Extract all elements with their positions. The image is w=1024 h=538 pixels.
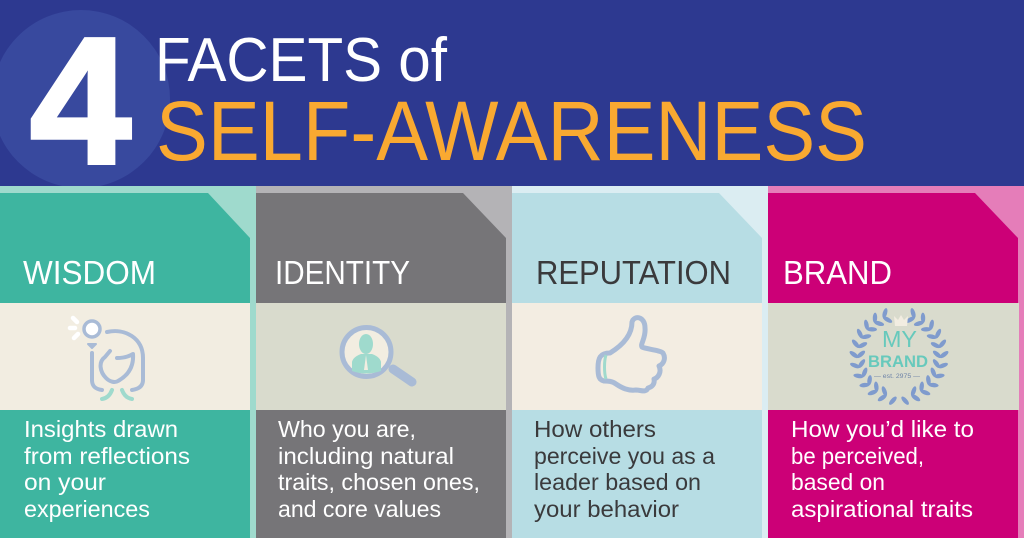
header banner <box>0 0 1024 202</box>
panel: wisdom <box>0 186 256 538</box>
icon: person with lightbulb <box>70 318 143 399</box>
body text: identity: and core values <box>278 496 441 522</box>
icon: my brand wreath badge <box>848 306 950 406</box>
panel: identity <box>256 186 512 538</box>
body text: brand: be perceived, <box>791 443 924 469</box>
body text: wisdom: experiences <box>24 496 150 522</box>
panel: reputation <box>512 186 768 538</box>
body text: reputation: your behavior <box>534 496 679 522</box>
heading: identity: IDENTITY <box>275 254 410 291</box>
body text: identity: Who you are, <box>278 416 416 442</box>
body text: reputation: perceive you as a <box>534 443 715 469</box>
heading: brand: BRAND <box>783 254 892 291</box>
icon: magnifier with person <box>342 328 412 382</box>
body text: brand: How you’d like to <box>791 416 974 442</box>
body text: reputation: How others <box>534 416 656 442</box>
heading: reputation: REPUTATION <box>536 254 731 291</box>
title line: SELF-AWARENESS: SELF-AWARENESS <box>156 84 867 178</box>
icon: my brand wreath badge: — est. 2975 — <box>874 374 920 380</box>
number circle <box>0 10 170 188</box>
icon: thumbs up <box>598 318 664 391</box>
body text: wisdom: from reflections <box>24 443 190 469</box>
icon: my brand wreath badge: MY <box>882 326 917 352</box>
body text: reputation: leader based on <box>534 469 701 495</box>
body text: brand: aspirational traits <box>791 496 973 522</box>
icon: my brand wreath badge: BRAND <box>868 352 928 371</box>
body text: identity <box>278 416 480 522</box>
heading: wisdom: WISDOM <box>23 254 156 291</box>
body text: wisdom <box>24 416 190 522</box>
big numeral 4: 4 <box>30 1 131 202</box>
body text: wisdom: on your <box>24 469 106 495</box>
body text: identity: traits, chosen ones, <box>278 469 480 495</box>
body text: reputation <box>534 416 715 522</box>
body text: brand <box>791 416 974 522</box>
body text: wisdom: Insights drawn <box>24 416 178 442</box>
body text: brand: based on <box>791 469 885 495</box>
body text: identity: including natural <box>278 443 454 469</box>
panel: brand <box>768 186 1024 538</box>
title line: FACETS of: FACETS of <box>155 26 448 95</box>
